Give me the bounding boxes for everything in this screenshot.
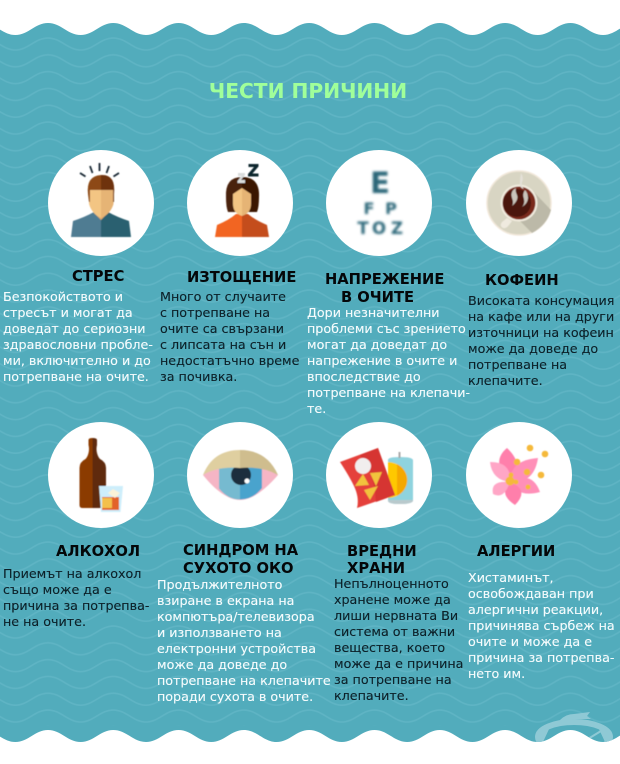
text: caffeine: може да доведе до — [468, 341, 598, 356]
heading: stress: СТРЕС — [72, 268, 124, 285]
heading: junk food: ВРЕДНИ — [347, 543, 417, 560]
text: junk food: система от важни — [334, 624, 455, 639]
text: junk food: Непълноценното — [334, 576, 449, 591]
panel: dry eye — [157, 422, 331, 704]
text: dry eye: потрепване на клепачите — [157, 673, 331, 688]
text: caffeine: източници на кофеин — [468, 325, 614, 340]
heading: dry eye: СИНДРОМ НА — [183, 542, 299, 559]
text: exhaustion: недостатъчно време — [160, 353, 300, 368]
icon: flower with pollen — [466, 422, 572, 528]
text: stress: здравословни пробле- — [3, 337, 153, 352]
icon: tired woman — [187, 150, 293, 256]
heading: eye strain: НАПРЕЖЕНИЕ — [325, 271, 444, 288]
heading: allergies: АЛЕРГИИ — [477, 543, 555, 560]
panel: dry eye: СУХОТО ОКО — [183, 560, 294, 577]
text: eye strain: впоследствие до — [307, 369, 421, 384]
text: dry eye: взиране в екрана на — [157, 593, 294, 608]
icon: chips and can — [326, 422, 432, 528]
icon: coffee cup — [466, 150, 572, 256]
panel: eye strain: В ОЧИТЕ — [341, 289, 414, 306]
icon: eye chart: P — [385, 199, 397, 218]
text: junk food: за потрепване на — [334, 672, 452, 687]
text: dry eye: може да доведе до — [157, 657, 287, 672]
text: caffeine: клепачите. — [468, 373, 543, 388]
text: eye strain: те. — [307, 401, 326, 416]
text: junk food: вещества, което — [334, 640, 445, 655]
text: alcohol: причина за потрепва- — [3, 598, 149, 613]
icon: eye chart: Z — [391, 219, 403, 238]
icon: eye chart: E — [370, 166, 390, 200]
text: eye strain: проблеми със зрението — [307, 321, 466, 336]
text: exhaustion: Много от случаите — [160, 289, 286, 304]
text: allergies: причинява сърбеж на — [468, 618, 615, 633]
text: dry eye: поради сухота в очите. — [157, 689, 313, 704]
panel: exhaustion — [160, 150, 300, 384]
text: dry eye: компютъра/телевизора — [157, 609, 315, 624]
panel: stress — [3, 150, 154, 384]
text: allergies: Хистаминът, — [468, 570, 554, 585]
icon: bottle and glass — [48, 422, 154, 528]
text: exhaustion: с липсата на сън и — [160, 337, 286, 352]
icon: eye chart: T — [357, 219, 369, 238]
panel: allergies — [466, 422, 615, 681]
text: stress: ми, включително и до — [3, 353, 151, 368]
text: alcohol: Приемът на алкохол — [3, 566, 141, 581]
text: stress: стресът и могат да — [3, 305, 133, 320]
text: dry eye: и използването на — [157, 625, 282, 640]
text: allergies: причина за потрепва- — [468, 650, 614, 665]
text: exhaustion: за почивка. — [160, 369, 237, 384]
watermark: snake logo — [535, 712, 613, 742]
text: junk food: лиши нервната Ви — [334, 608, 458, 623]
heading: exhaustion: ИЗТОЩЕНИЕ — [187, 269, 296, 286]
text: stress: доведат до сериозни — [3, 321, 146, 336]
text: allergies: алергични реакции, — [468, 602, 603, 617]
icon: eye chart: O — [372, 219, 386, 238]
text: caffeine: на кафе или на други — [468, 309, 614, 324]
title: ЧЕСТИ ПРИЧИНИ — [209, 79, 407, 103]
heading: alcohol: АЛКОХОЛ — [56, 543, 140, 560]
panel: caffeine — [466, 150, 614, 388]
text: dry eye: Продължителното — [157, 577, 283, 592]
text: exhaustion: с потрепване на — [160, 305, 270, 320]
text: caffeine: Високата консумация — [468, 293, 614, 308]
text: allergies: освобождаван при — [468, 586, 594, 601]
panel: alcohol — [3, 422, 154, 629]
text: allergies: нето им. — [468, 666, 525, 681]
text: alcohol: също може да е — [3, 582, 112, 597]
icon: eye chart — [326, 150, 432, 256]
text: alcohol: не на очите. — [3, 614, 86, 629]
text: junk food: хранене може да — [334, 592, 451, 607]
text: stress: потрепване на очите. — [3, 369, 149, 384]
text: eye strain: Дори незначителни — [307, 305, 440, 320]
heading: caffeine: КОФЕИН — [485, 272, 559, 289]
text: eye strain: могат да доведат до — [307, 337, 447, 352]
text: exhaustion: очите са свързани — [160, 321, 284, 336]
icon: stressed man — [48, 150, 154, 256]
text: dry eye: електронни устройства — [157, 641, 316, 656]
panel: eye strain — [307, 150, 470, 416]
icon: red eye — [187, 422, 293, 528]
text: stress: Безпокойството и — [3, 289, 123, 304]
panel: junk food: ХРАНИ — [347, 560, 405, 577]
panel: junk food — [326, 422, 463, 703]
text: eye strain: напрежение в очите и — [307, 353, 457, 368]
text: caffeine: потрепване на — [468, 357, 567, 372]
text: allergies: очите и може да е — [468, 634, 592, 649]
text: junk food: може да е причина — [334, 656, 463, 671]
icon: eye chart: F — [364, 199, 374, 218]
text: junk food: клепачите. — [334, 688, 409, 703]
text: eye strain: потрепване на клепачи- — [307, 385, 470, 400]
